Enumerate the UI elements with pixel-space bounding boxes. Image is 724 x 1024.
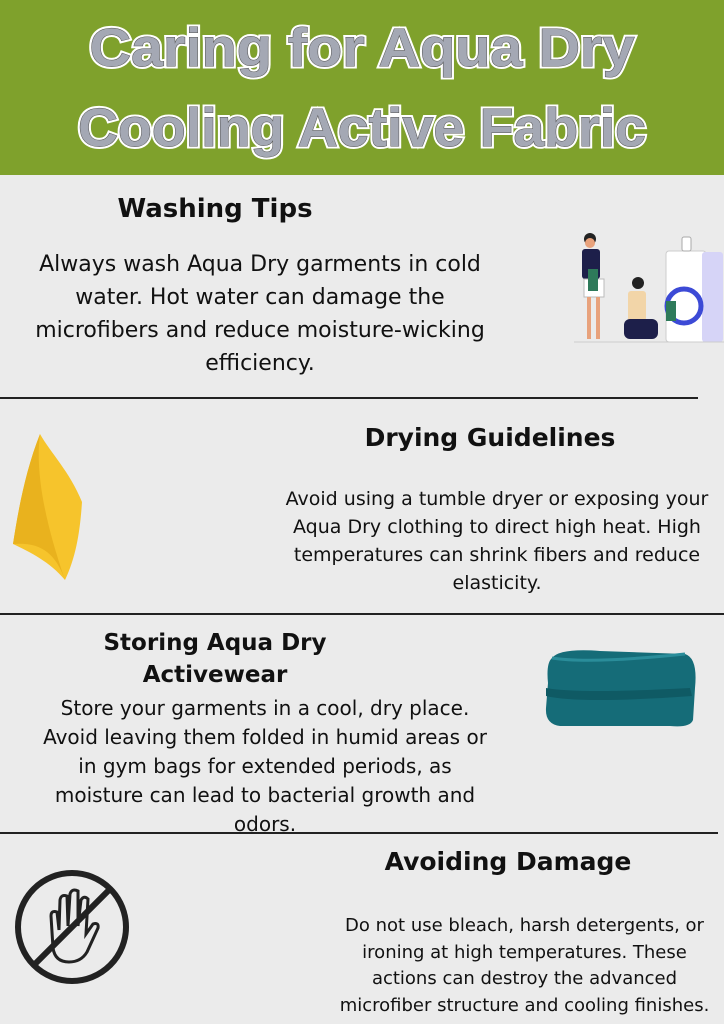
text: drying bbox=[286, 488, 708, 594]
text: storing: Store your garments in a cool, dry place. bbox=[61, 696, 469, 720]
icon: folded teal towel bbox=[546, 650, 696, 726]
text: drying: Avoid using a tumble dryer or exposing your bbox=[286, 488, 708, 510]
section: avoiding damage bbox=[15, 847, 709, 1016]
text: drying: temperatures can shrink fibers and reduce bbox=[294, 544, 700, 566]
text: washing: Always wash Aqua Dry garments in cold bbox=[39, 252, 481, 277]
title: Caring for Aqua Dry bbox=[90, 18, 634, 78]
heading: storing: Activewear bbox=[143, 662, 287, 688]
text: storing: odors. bbox=[234, 812, 296, 836]
text: storing: moisture can lead to bacterial growth and bbox=[55, 783, 475, 807]
title bbox=[78, 18, 648, 160]
text: washing: microfibers and reduce moisture-wicking bbox=[35, 318, 485, 343]
text: storing: in gym bags for extended periods, as bbox=[78, 754, 452, 778]
heading: storing: Storing Aqua Dry bbox=[103, 630, 327, 656]
title banner bbox=[0, 0, 724, 175]
title: Caring for Aqua Dry bbox=[90, 18, 634, 78]
icon: yellow cloth bbox=[13, 434, 82, 580]
heading: drying guidelines: Drying Guidelines bbox=[365, 423, 615, 452]
icon: people doing laundry bbox=[574, 233, 724, 342]
text: avoiding damage bbox=[340, 915, 709, 1016]
icon: no hand bbox=[15, 870, 129, 984]
text: storing: Avoid leaving them folded in humid areas or bbox=[43, 725, 487, 749]
heading: washing tips: Washing Tips bbox=[117, 194, 313, 224]
title: Cooling Active Fabric bbox=[78, 98, 646, 158]
text: avoiding damage: Do not use bleach, harsh detergents, or bbox=[345, 915, 704, 936]
text: washing: efficiency. bbox=[205, 351, 315, 376]
text: avoiding damage: microfiber structure and cooling finishes. bbox=[340, 994, 709, 1016]
text: storing bbox=[43, 696, 487, 836]
text: washing bbox=[35, 252, 485, 376]
text: avoiding damage: ironing at high temperatures. These bbox=[362, 942, 687, 962]
section: drying bbox=[13, 423, 708, 594]
text: drying: elasticity. bbox=[452, 572, 542, 594]
text: avoiding damage: actions can destroy the advanced bbox=[372, 968, 677, 989]
heading: storing bbox=[103, 630, 327, 688]
text: washing: water. Hot water can damage the bbox=[75, 285, 445, 310]
title: Cooling Active Fabric bbox=[78, 98, 646, 158]
heading: avoiding damage: Avoiding Damage bbox=[385, 847, 631, 876]
section: storing bbox=[43, 630, 696, 836]
text: drying: Aqua Dry clothing to direct high heat. High bbox=[293, 516, 701, 538]
section: washing tips bbox=[35, 194, 724, 376]
